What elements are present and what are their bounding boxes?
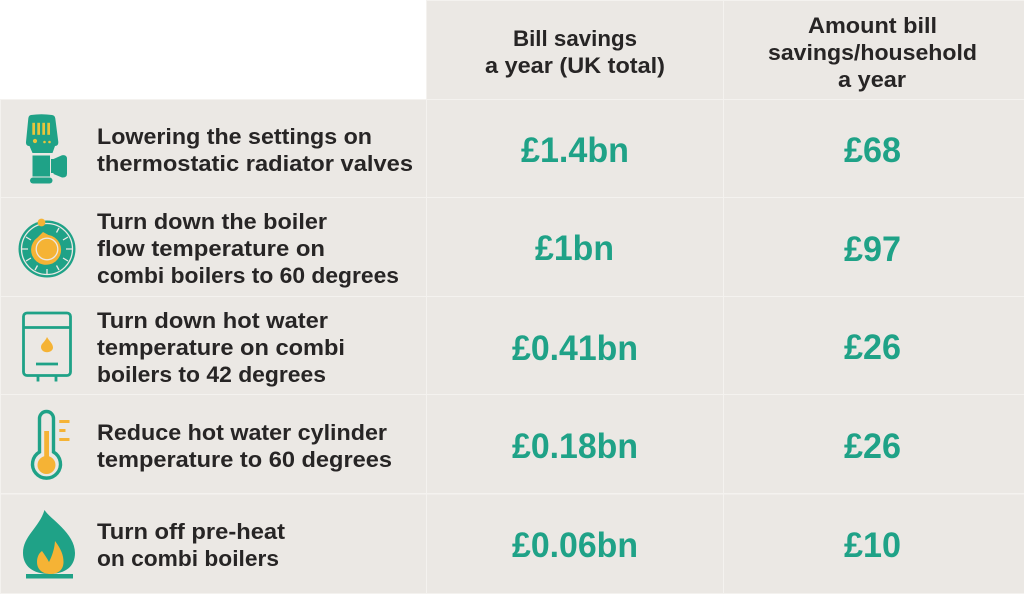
UK saving value: £0.41bn xyxy=(512,329,638,368)
description xyxy=(97,308,345,387)
row 1: thermostatic radiator valves xyxy=(1,100,1024,197)
UK saving value: £1.4bn xyxy=(521,131,629,170)
icon: thermometer xyxy=(33,412,70,478)
UK saving value: £0.06bn xyxy=(512,526,638,565)
column header: amount per household: a year xyxy=(838,67,906,92)
description: Lowering the settings on xyxy=(97,124,372,149)
household saving value: £26 xyxy=(844,328,901,367)
household saving value: £97 xyxy=(844,230,901,269)
description: on combi boilers xyxy=(97,546,279,571)
column header: amount per household: savings/household xyxy=(768,40,977,65)
description xyxy=(97,420,392,472)
row 4: hot water cylinder xyxy=(1,395,1024,493)
description: Turn down the boiler xyxy=(97,209,327,234)
column header: bill savings UK total xyxy=(427,1,723,99)
description xyxy=(97,209,399,288)
icon: combi boiler xyxy=(24,313,70,382)
description: Turn down hot water xyxy=(97,308,328,333)
description: Turn off pre-heat xyxy=(97,519,286,544)
icon: boiler dial xyxy=(18,219,76,278)
household saving value: £10 xyxy=(844,526,901,565)
column header: bill savings UK total: Bill savings xyxy=(513,26,637,51)
UK saving value: £1bn xyxy=(535,229,614,268)
icon: radiator valve xyxy=(26,114,67,184)
column header: amount per household: Amount bill xyxy=(808,13,937,38)
icon: gas flame xyxy=(23,510,75,578)
row 2: boiler flow temperature xyxy=(1,198,1024,296)
description xyxy=(97,519,286,571)
column header: amount per household xyxy=(724,1,1024,99)
household saving value: £68 xyxy=(844,131,901,170)
description xyxy=(97,124,413,176)
description: temperature on combi xyxy=(97,335,345,360)
description: combi boilers to 60 degrees xyxy=(97,263,399,288)
description: Reduce hot water cylinder xyxy=(97,420,387,445)
UK saving value: £0.18bn xyxy=(512,427,638,466)
household saving value: £26 xyxy=(844,427,901,466)
description: flow temperature on xyxy=(97,236,325,261)
column header: bill savings UK total: a year (UK total) xyxy=(485,53,665,78)
row 3: hot water temperature xyxy=(1,297,1024,394)
description: thermostatic radiator valves xyxy=(97,151,413,176)
row 5: pre-heat xyxy=(1,494,1024,593)
description: boilers to 42 degrees xyxy=(97,362,326,387)
description: temperature to 60 degrees xyxy=(97,447,392,472)
